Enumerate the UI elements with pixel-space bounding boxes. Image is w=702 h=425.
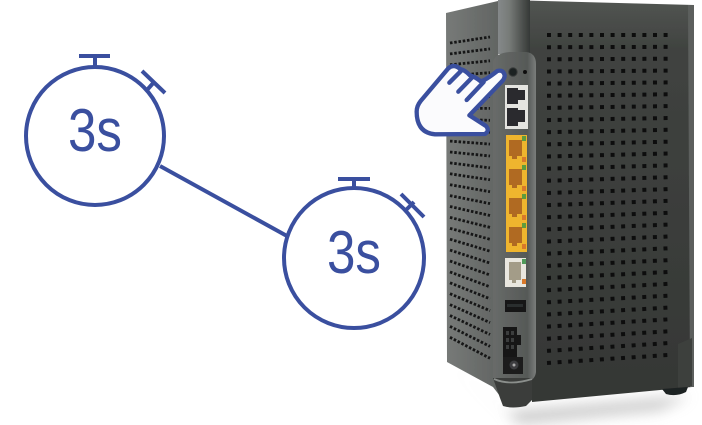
- left face perforations: [450, 37, 490, 358]
- back port strip: [493, 52, 536, 381]
- timer 2: 3 seconds: 3s: [327, 219, 381, 286]
- yellow LAN ports: [506, 135, 527, 252]
- USB port: [505, 300, 526, 312]
- power connector: [503, 327, 521, 357]
- indicator dot: [523, 70, 527, 74]
- icon: pressing hand: [417, 66, 505, 134]
- DC jack: [503, 357, 523, 374]
- right face perforations: [547, 35, 668, 363]
- router right face: [505, 0, 694, 402]
- corner panel: [678, 338, 692, 388]
- timer 1: 3 seconds: 3s: [68, 97, 122, 164]
- router left face: [446, 1, 503, 400]
- white WAN port: [505, 258, 526, 287]
- top corner highlight: [498, 0, 530, 54]
- timer 1: 3 seconds: [26, 56, 165, 205]
- right foot: [662, 387, 688, 395]
- right edge highlight: [688, 5, 694, 387]
- power button: [509, 68, 517, 76]
- router: [446, 0, 694, 424]
- connector line between timers: [160, 166, 287, 236]
- timer 2: 3 seconds: [284, 179, 424, 328]
- router shadow: [450, 364, 690, 424]
- base and foot: [493, 378, 532, 408]
- phone ports: [505, 85, 528, 129]
- base lip highlight: [494, 379, 532, 382]
